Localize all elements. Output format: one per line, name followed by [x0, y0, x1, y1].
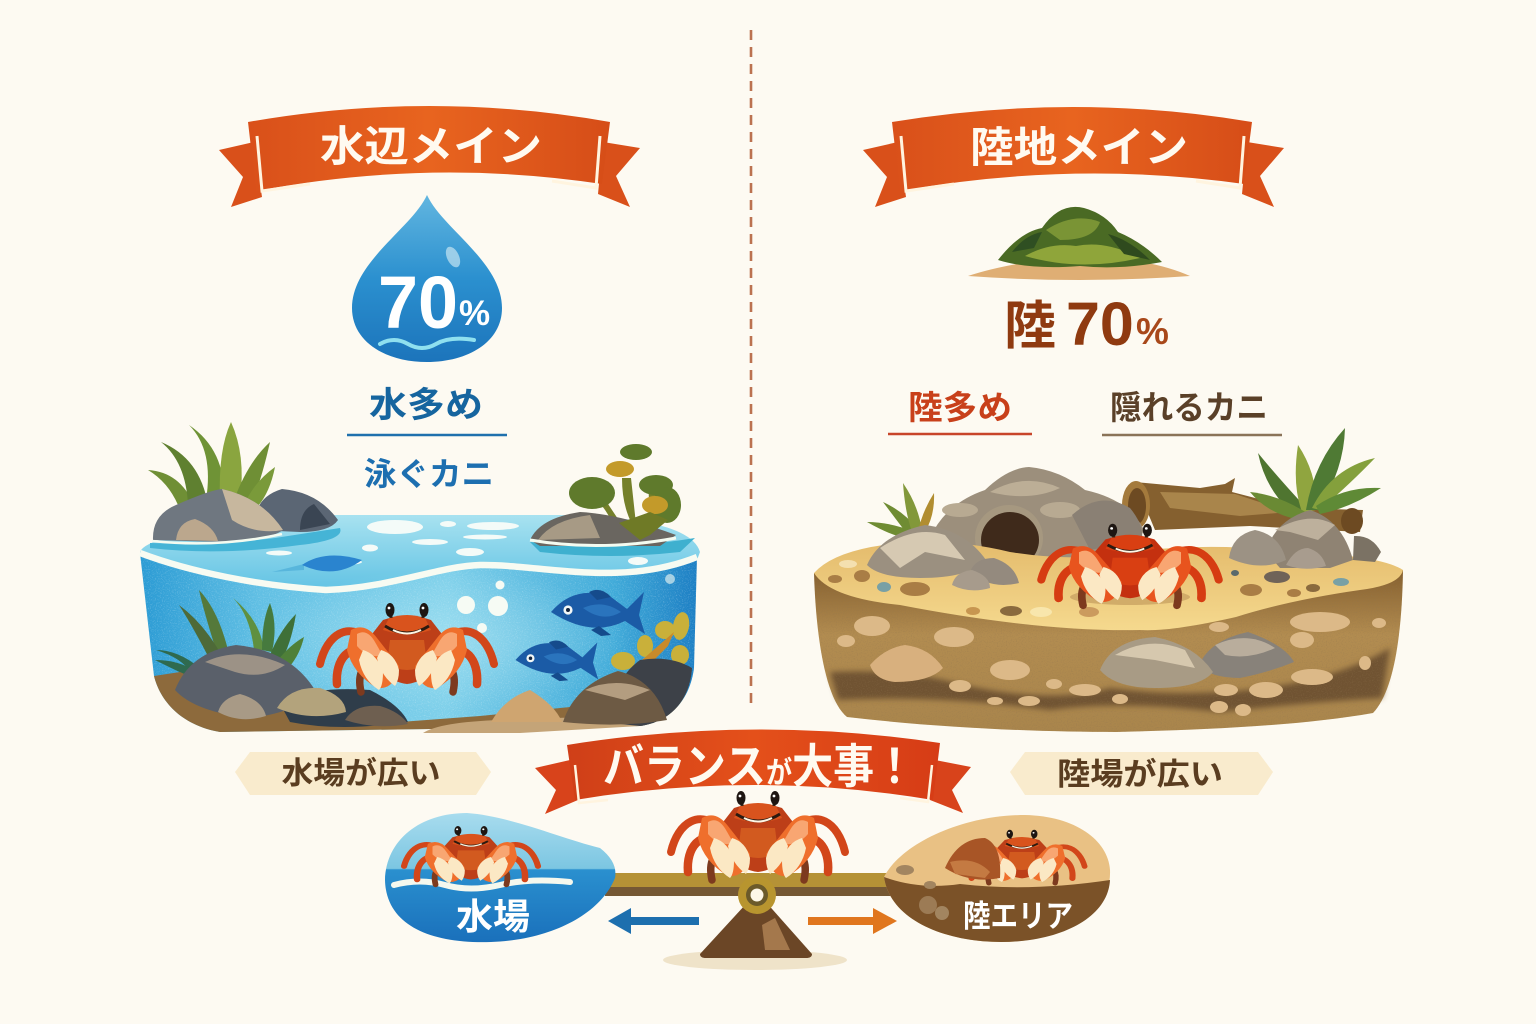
illustration: land habitat [814, 428, 1403, 732]
fish: upper [551, 590, 645, 636]
label: hiding crabs: 隠れるカニ [1110, 389, 1268, 426]
plant: grass on left rock [148, 422, 275, 506]
pivot [738, 876, 776, 914]
soil grain [814, 570, 1403, 732]
drop label: 70: 70 [378, 261, 458, 344]
stat: land 70%: 70 [1066, 290, 1134, 358]
tag: wide land area: 陸場が広い [1057, 757, 1223, 792]
heading text: water-side: 水辺メイン [320, 123, 542, 170]
icon: water drop 70% [352, 195, 502, 362]
plant: leaves left [867, 483, 934, 538]
pebbles [828, 560, 1386, 716]
water grain [140, 553, 697, 732]
rock island [530, 512, 695, 556]
banner: balance is important [535, 729, 971, 814]
balance scale [385, 791, 1110, 970]
water blob label: 水場 [456, 896, 530, 937]
seaweed left [155, 590, 304, 676]
fallen log [1122, 478, 1363, 534]
plant: leaves right [1250, 428, 1381, 520]
fish: lower [516, 641, 598, 681]
sand top surface [814, 542, 1403, 630]
fulcrum highlight [762, 918, 790, 950]
crab: center [671, 791, 845, 880]
drop label: percent: % [459, 294, 490, 333]
stat: land 70% [1004, 290, 1169, 358]
blob: water [385, 813, 615, 942]
blob: land [884, 815, 1110, 942]
heading text: land-side: 陸地メイン [970, 124, 1188, 171]
sand and soil block [814, 570, 1403, 732]
underground rocks [870, 632, 1294, 688]
heading text: balance: バランスが大事！ [603, 740, 915, 793]
water light glow [250, 570, 630, 710]
water body cutaway [140, 553, 697, 732]
dark soil band [830, 648, 1390, 712]
label: much land: 陸多め [908, 389, 1012, 426]
illustration: water habitat [140, 422, 700, 733]
arrow: right [808, 908, 897, 934]
rock hill with burrow [934, 467, 1144, 571]
label: much water: 水多め [369, 386, 483, 425]
crab: half-hidden in sand [945, 830, 1085, 883]
tag: wide water area [235, 752, 491, 795]
label: swimming crabs: 泳ぐカニ [364, 456, 494, 492]
base shadow [663, 950, 847, 970]
fulcrum [700, 892, 812, 958]
blue shadow fish on the surface [272, 556, 362, 572]
center dashed divider [750, 30, 752, 706]
stat: land 70%: 陸 [1004, 298, 1056, 356]
plant: lily leaves on island [569, 444, 681, 524]
bubbles [457, 574, 675, 633]
tag: wide water area: 水場が広い [282, 756, 440, 791]
surface highlights [266, 520, 648, 565]
yellow water plant right [611, 611, 691, 677]
sea floor and underwater rocks [154, 645, 692, 733]
burrow shadow under crab [1070, 589, 1190, 605]
beam [605, 873, 895, 896]
water surface [140, 515, 700, 590]
arrow: left [608, 908, 699, 934]
rocks: left shore [150, 489, 340, 551]
land blob label: 陸エリア [963, 899, 1073, 934]
crab: small in water [404, 826, 538, 885]
icon: green island [968, 207, 1190, 280]
crab: land [1041, 524, 1219, 606]
rocks: front left [867, 525, 1019, 590]
white wave line [140, 553, 697, 590]
tag: wide land area [1010, 752, 1273, 795]
stat: land 70%: % [1136, 311, 1169, 352]
banner: water-side heading [219, 106, 640, 207]
crab: water [320, 603, 494, 692]
banner: land-side heading [863, 107, 1284, 207]
rocks: right group [1229, 510, 1381, 569]
